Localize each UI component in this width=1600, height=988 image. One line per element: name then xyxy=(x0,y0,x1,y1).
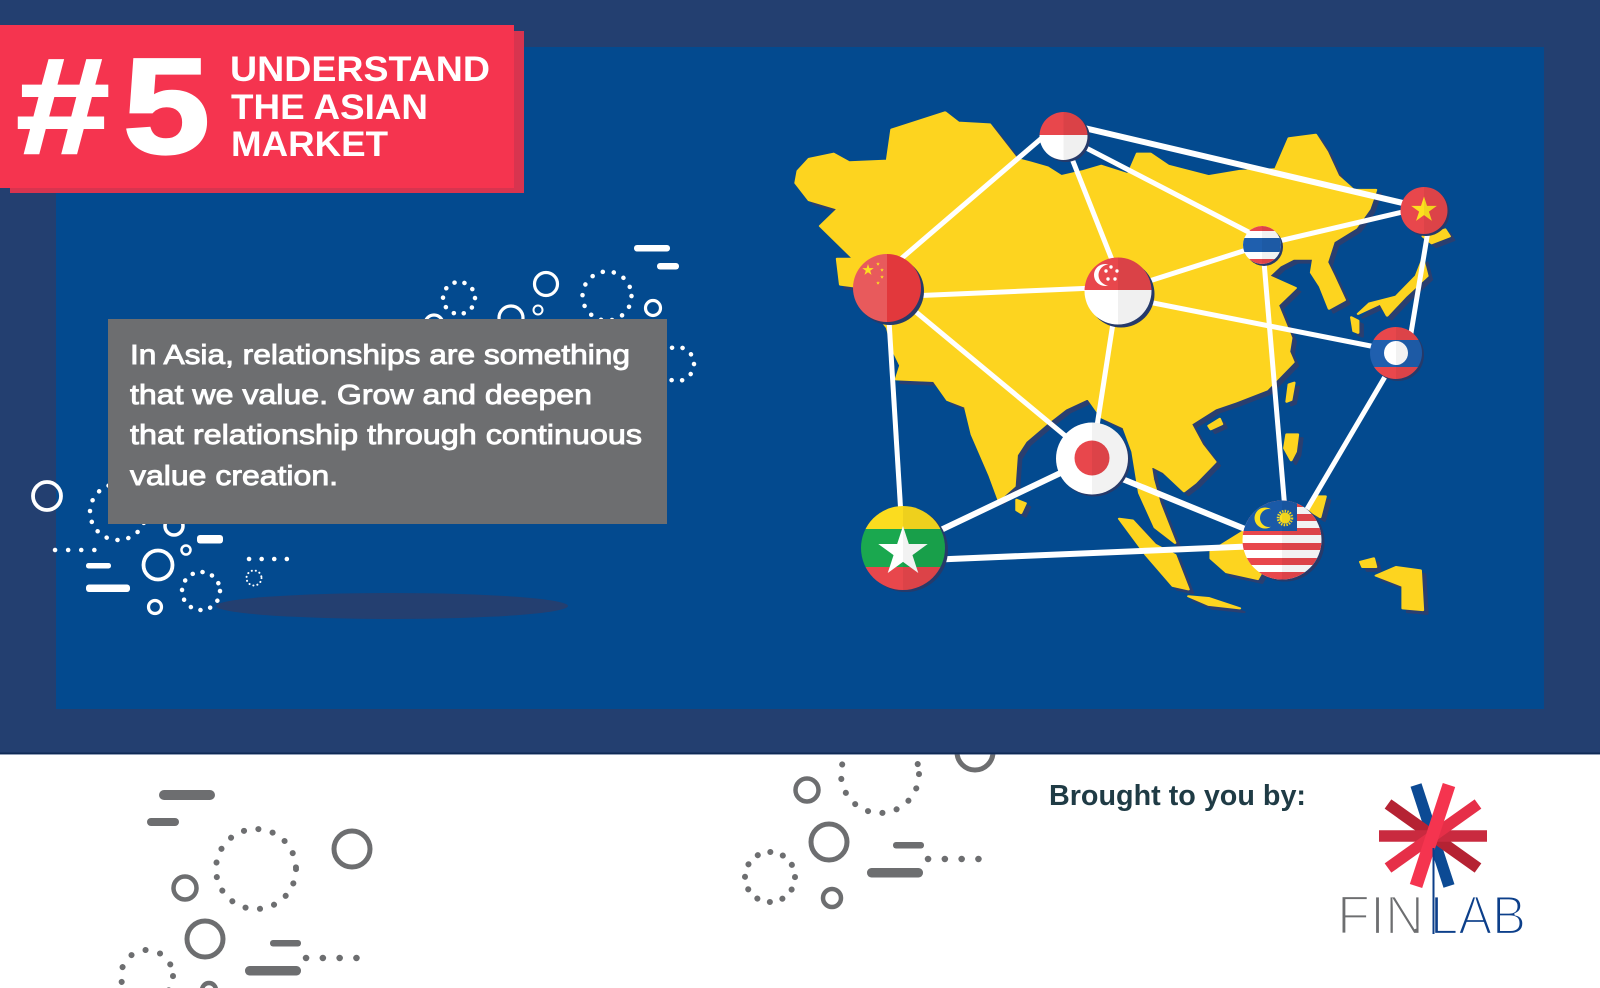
logo star xyxy=(1379,785,1487,886)
flag: China xyxy=(853,254,924,325)
grey text box xyxy=(108,319,667,524)
flag: Indonesia xyxy=(1039,112,1090,162)
flag: Singapore xyxy=(1084,257,1154,328)
body text: In Asia, relationships are something xyxy=(130,339,630,370)
flag: Laos xyxy=(1369,326,1424,381)
logo wordmark xyxy=(1337,848,1526,946)
title text: UNDERSTAND xyxy=(230,50,490,89)
body text: value creation. xyxy=(130,460,338,491)
logo wordmark: FIN xyxy=(1337,884,1424,946)
title banner xyxy=(0,25,524,193)
title number: 5 xyxy=(123,30,210,182)
logo wordmark: LAB xyxy=(1430,884,1526,946)
inner blue panel xyxy=(56,47,1544,709)
brought-to-you-by label: Brought to you by: xyxy=(1049,780,1306,812)
FinLab logo xyxy=(1337,785,1526,946)
title text xyxy=(230,50,490,164)
title number: # xyxy=(14,30,107,182)
flag: Malaysia xyxy=(1242,500,1324,582)
decorative shapes: lower middle, grey xyxy=(745,734,993,907)
decorative shapes: lower left, grey xyxy=(121,790,370,988)
network lines xyxy=(887,123,1429,561)
title text: THE ASIAN xyxy=(231,88,428,127)
decorative shapes: above text box xyxy=(425,245,694,381)
navy framed panel xyxy=(0,0,1600,754)
ground shadow ellipse xyxy=(216,593,568,619)
body text xyxy=(130,339,642,491)
title text: MARKET xyxy=(231,125,388,164)
title number xyxy=(14,30,210,182)
flag: Thailand xyxy=(1243,226,1283,266)
flag: Vietnam xyxy=(1400,187,1450,236)
map of Asia xyxy=(796,112,1454,614)
body text: that relationship through continuous xyxy=(130,419,642,450)
body text: that we value. Grow and deepen xyxy=(130,379,592,410)
flag: Myanmar xyxy=(860,505,948,592)
flag: Japan xyxy=(1055,421,1130,496)
decorative shapes: below text box xyxy=(33,482,290,614)
